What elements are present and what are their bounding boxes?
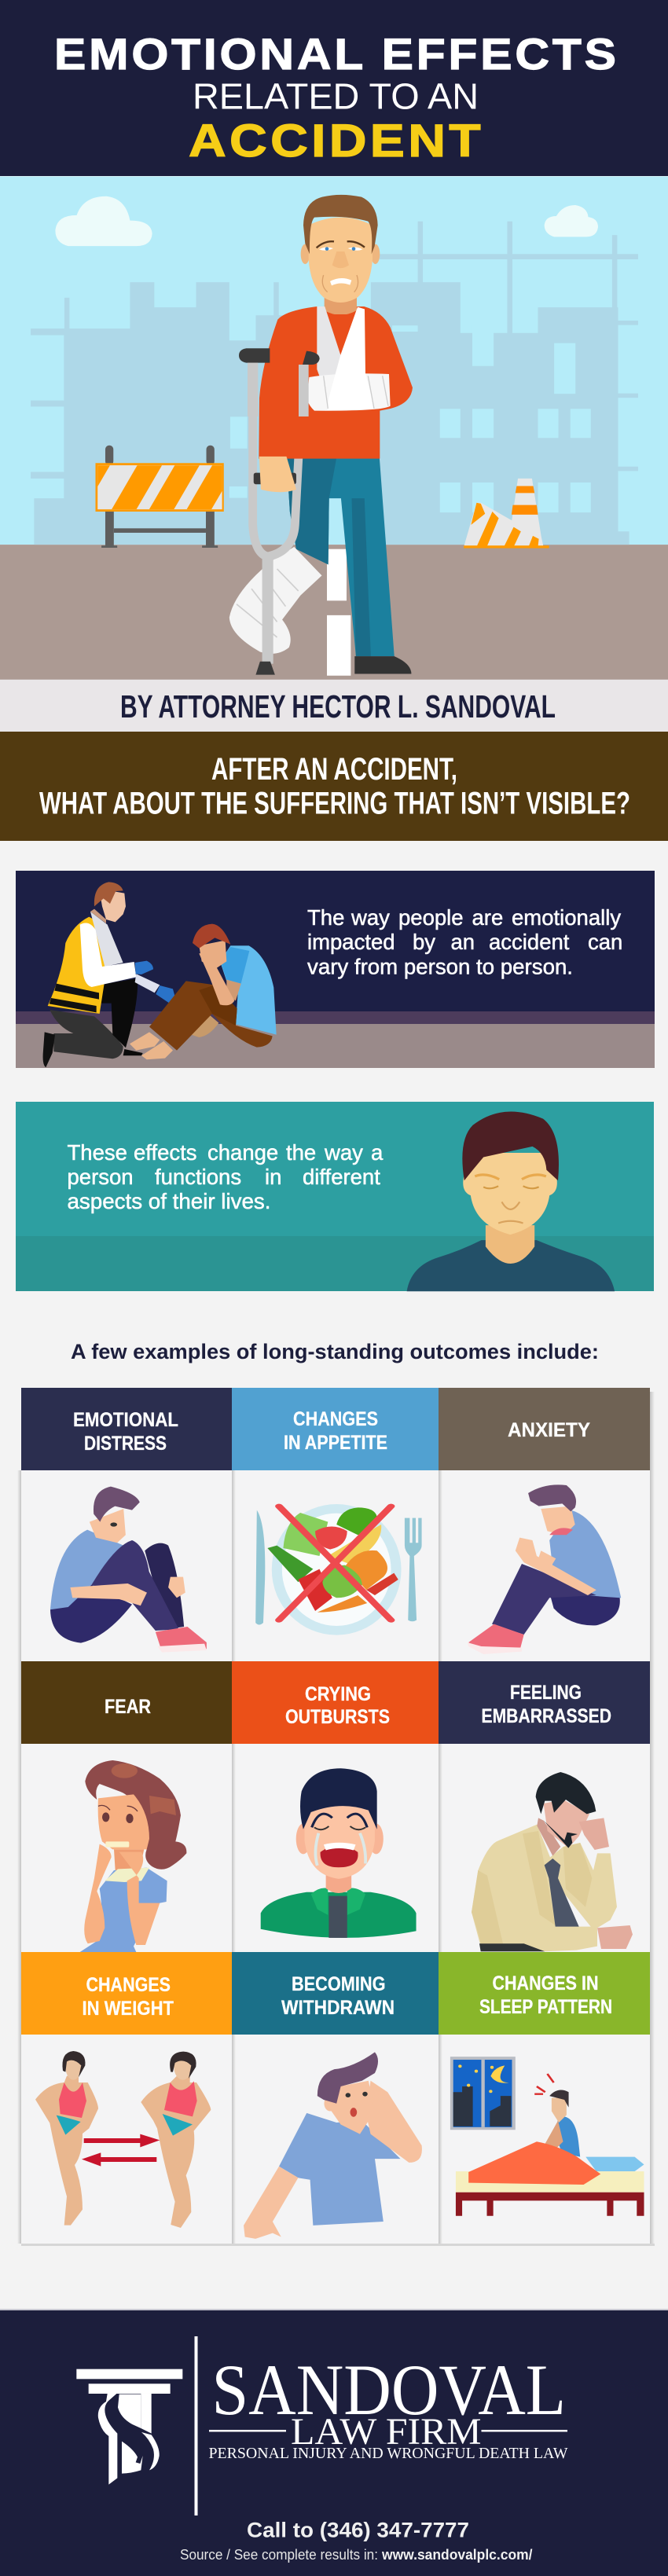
illustration: worried man [244,2052,422,2239]
illustration: frightened woman [80,1760,186,1952]
card: becoming withdrawn [232,1952,439,2239]
label: IN APPETITE [284,1432,387,1454]
panel: functional effects [16,1102,654,1291]
text: effects change functioning: person [68,1165,134,1189]
panel: question banner [0,732,668,841]
label: IN WEIGHT [82,1998,174,2020]
logo: firm name: PERSONAL INJURY AND WRONGFUL DEATH LAW [209,2445,568,2462]
label [73,1409,178,1455]
text: effects change functioning: These [68,1140,127,1165]
title line: related to an: RELATED TO AN [193,75,479,116]
text: people are impacted differently: people [398,905,464,930]
text: effects change functioning: different [303,1165,380,1189]
title line: emotional effects: EMOTIONAL EFFECTS [54,30,616,79]
card: feeling embarrassed [439,1661,650,1951]
trousers [286,457,395,656]
heading: examples: A few examples of long-standing outcomes include: [71,1340,599,1363]
source line: Source / See complete results in: [180,2547,378,2563]
text: people are impacted differently: accident [489,930,570,954]
text: effects change functioning: a [371,1140,384,1165]
text: people are impacted differently: vary from person to person. [307,954,573,979]
text: people are impacted differently: emotionally [512,905,621,930]
card: emotional distress [21,1388,232,1653]
label: OUTBURSTS [285,1706,390,1728]
illustration: sad man portrait [407,1112,615,1291]
text: effects change functioning: in [265,1165,281,1189]
crutch [253,361,303,664]
neck [325,296,357,315]
panel: byline [0,680,668,732]
label [281,1973,395,2019]
crutch top [239,348,320,365]
logo: firm name: SANDOVAL [212,2350,566,2430]
medic [43,882,176,1067]
arm sling [317,306,340,398]
logo: firm name: LAW FIRM [291,2411,481,2453]
call to action: Call to (346) 347-7777 [247,2518,469,2541]
label: DISTRESS [84,1433,167,1455]
shirt [259,306,413,459]
text: people are impacted differently: The [307,905,344,930]
hand on crutch [259,457,296,492]
label: CHANGES IN [492,1972,599,1994]
label: SLEEP PATTERN [479,1996,612,2018]
question line 1: AFTER AN ACCIDENT, [211,752,457,787]
text: people are impacted differently: impacted [307,930,395,954]
card: changes in sleep pattern [439,1952,650,2216]
label [284,1408,387,1454]
text: people are impacted differently [307,905,622,979]
arrows [82,2134,160,2167]
leg cast [229,547,322,654]
label [481,1682,611,1727]
text: effects change functioning: aspects of their lives. [68,1189,270,1213]
icon: clouds [55,196,598,246]
label [479,1972,612,2018]
illustration: man awake in bed [450,2057,644,2216]
label: ANXIETY [508,1419,590,1441]
illustration: medic and injured person [43,882,277,1067]
icon: road barrier [96,445,224,548]
outcomes grid [17,1388,655,2246]
text: effects change functioning: functions [155,1165,241,1189]
source line: www.sandovalplc.com/ [381,2547,533,2563]
text: people are impacted differently: by [413,930,435,954]
skyline [31,222,638,545]
source line [180,2547,533,2563]
card: anxiety [439,1388,650,1654]
panel: hero illustration [0,176,668,680]
text: people are impacted differently: are [472,905,503,930]
panel: title banner [0,0,668,176]
label [82,1974,174,2020]
card: changes in appetite [232,1388,439,1635]
label: WITHDRAWN [281,1997,395,2019]
illustration: anxious man [468,1484,621,1654]
text: effects change functioning [68,1140,384,1213]
forearm cast [307,373,391,411]
panel: footer [0,2309,668,2576]
text: effects change functioning: the [286,1140,316,1165]
seated person [130,924,277,1059]
panel: emotional impact [16,871,655,1068]
card: crying outbursts [232,1661,439,1938]
label: CRYING [305,1683,371,1705]
label: CHANGES [86,1974,171,1996]
text: effects change functioning: way [324,1140,363,1165]
card: fear [21,1661,232,1952]
label: FEAR [105,1696,151,1718]
label: EMBARRASSED [481,1705,611,1727]
text: effects change functioning: effects [134,1140,197,1165]
text: effects change functioning: change [207,1140,278,1165]
title line: accident: ACCIDENT [189,116,481,167]
illustration: two body shapes with arrows [35,2051,211,2228]
illustration: man hugging knees [50,1487,207,1653]
shoe [354,656,411,674]
divider [195,2336,198,2515]
label: FEELING [510,1682,582,1704]
text: people are impacted differently: can [588,930,622,954]
road markings [327,549,351,676]
label: BECOMING [292,1973,385,1995]
illustration: man with hand on forehead [472,1772,633,1951]
label: CHANGES [293,1408,378,1430]
logo: firm name [209,2350,568,2462]
wider figure [141,2052,211,2228]
thin figure [35,2051,98,2226]
illustration: crying man [261,1768,417,1938]
label: EMOTIONAL [73,1409,178,1431]
text: people are impacted differently: an [451,930,475,954]
logo: pillar with S [76,2369,182,2485]
card: changes in weight [21,1952,232,2228]
illustration: crossed out plate [255,1504,422,1635]
head [301,195,380,303]
icon: traffic cones [464,479,549,549]
label [285,1683,390,1728]
text: people are impacted differently: way [351,905,390,930]
figure: injured man [229,195,413,675]
